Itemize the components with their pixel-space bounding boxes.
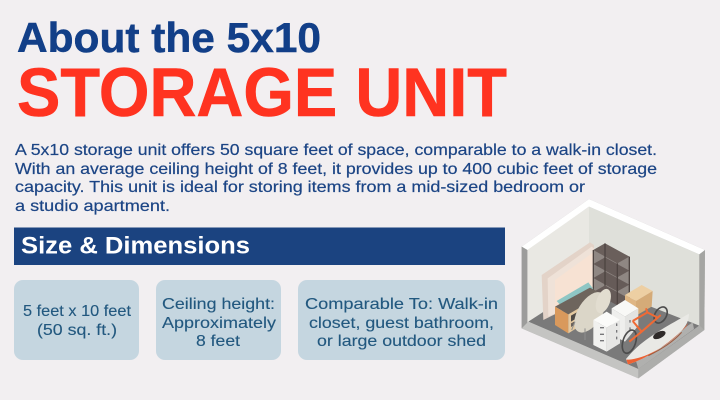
intro text block: With an average ceiling height of 8 feet, it provides up to 400 cubic feet of storage — [15, 161, 657, 178]
metal shelf — [593, 243, 629, 305]
card: footprint: (50 sq. ft.) — [37, 322, 117, 339]
title: STORAGE UNIT: STORAGE UNIT — [17, 54, 507, 131]
rear white storage boxes — [612, 300, 638, 342]
bicycle — [620, 305, 670, 355]
section heading: Size & Dimensions — [14, 228, 505, 265]
intro text block: A 5x10 storage unit offers 50 square feet of space, comparable to a walk-in closet. — [15, 142, 657, 159]
card: footprint — [14, 280, 139, 360]
cardboard box — [625, 285, 653, 316]
card: comparable to: Comparable To: Walk-in — [305, 296, 498, 313]
card: comparable to — [298, 280, 505, 360]
card: ceiling height: 8 feet — [196, 333, 241, 350]
title: About the 5x10: About the 5x10 — [17, 14, 321, 61]
intro text block — [15, 142, 657, 215]
leaning boards — [542, 242, 594, 320]
card: comparable to: or large outdoor shed — [317, 333, 486, 350]
card: comparable to: closet, guest bathroom, — [309, 315, 494, 332]
card: footprint: 5 feet x 10 feet — [23, 303, 132, 320]
front white storage boxes — [593, 312, 630, 352]
desk with glass case — [555, 282, 603, 333]
card: ceiling height — [156, 280, 281, 360]
intro text block: a studio apartment. — [15, 198, 170, 215]
card: ceiling height: Approximately — [162, 315, 276, 332]
round table tops — [568, 287, 614, 340]
section heading: Size & Dimensions: Size & Dimensions — [21, 232, 250, 260]
card: ceiling height: Ceiling height: — [162, 296, 275, 313]
kayak on rack — [626, 314, 694, 369]
illustration: storage unit — [522, 199, 705, 378]
intro text block: capacity. This unit is ideal for storing items from a mid-sized bedroom or — [15, 179, 586, 196]
